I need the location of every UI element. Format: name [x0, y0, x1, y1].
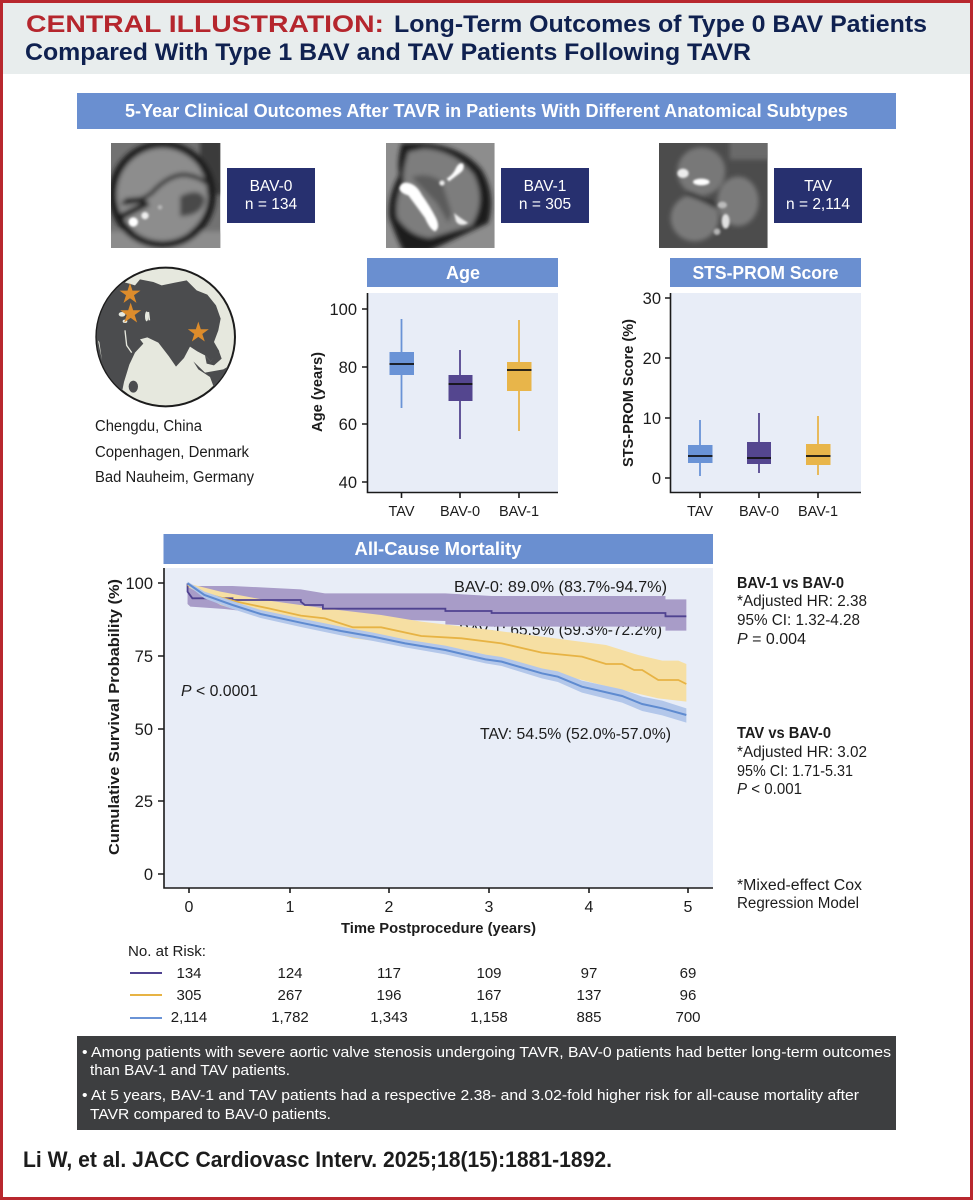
footnote: Regression Model — [737, 895, 859, 912]
key takeaways box: • Among patients with severe aortic valve stenosis undergoing TAVR, BAV-0 patients had better long-term outcomes — [82, 1045, 891, 1061]
title banner: Long-Term Outcomes of Type 0 BAV Patients — [394, 11, 927, 38]
number at risk table: 2,114 — [171, 1009, 207, 1026]
number at risk table: 196 — [376, 987, 402, 1004]
curve: BAV-1 line — [188, 585, 686, 684]
panel: Age box plot: 60 — [339, 416, 357, 434]
group label: TAV: n = 2,114 — [786, 196, 850, 213]
curve: TAV line — [188, 583, 686, 715]
number at risk table — [128, 943, 701, 1026]
heading: STS-PROM Score: STS-PROM Score — [692, 263, 838, 283]
number at risk table: 305 — [176, 987, 202, 1004]
number at risk table: 69 — [680, 965, 696, 982]
number at risk table: 267 — [277, 987, 303, 1004]
heading: Age — [367, 258, 558, 287]
footnote — [737, 877, 862, 912]
panel: STS-PROM box plot: TAV — [687, 504, 713, 520]
panel: All-Cause Mortality survival chart: 5 — [684, 899, 693, 916]
panel: STS-PROM box plot: STS-PROM Score (%) — [620, 319, 637, 467]
label: TAV outcome: TAV: 54.5% (52.0%-57.0%) — [480, 726, 671, 743]
number at risk table: 117 — [377, 965, 401, 982]
panel: STS-PROM box plot: BAV-1 — [798, 504, 838, 520]
title banner — [3, 3, 970, 74]
box: BAV-0 age — [448, 350, 472, 439]
heading: All-Cause Mortality: All-Cause Mortality — [354, 539, 522, 559]
panel: All-Cause Mortality survival chart: 0 — [144, 866, 153, 884]
panel: Age box plot: TAV — [388, 504, 415, 520]
number at risk table: 109 — [476, 965, 502, 982]
panel: All-Cause Mortality survival chart: 4 — [585, 899, 594, 916]
section heading: 5-Year Clinical Outcomes After TAVR in Patients With Different Anatomical Subtypes — [125, 101, 848, 121]
footnote: *Mixed-effect Cox — [737, 877, 862, 894]
curve: TAV confidence band — [188, 582, 686, 723]
panel: STS-PROM box plot: 0 — [652, 470, 661, 488]
heading: Age: Age — [446, 263, 480, 283]
box: BAV-1 STS — [806, 416, 830, 475]
number at risk table: No. at Risk: — [128, 943, 206, 960]
title banner: Compared With Type 1 BAV and TAV Patients Following TAVR — [25, 39, 751, 66]
group label: TAV — [774, 168, 862, 223]
panel: All-Cause Mortality survival chart: Time Postprocedure (years) — [341, 921, 536, 937]
section heading — [77, 93, 896, 129]
label: BAV-1 outcome: BAV-1: 65.5% (59.3%-72.2%) — [459, 622, 662, 639]
statistics: TAV vs BAV-0: *Adjusted HR: 3.02 — [737, 744, 867, 761]
key takeaways box — [77, 1036, 896, 1130]
panel: All-Cause Mortality survival chart: 75 — [135, 648, 153, 666]
CT image: TAV — [659, 138, 773, 248]
panel: All-Cause Mortality survival chart: 50 — [135, 721, 153, 739]
panel: Age box plot: 80 — [339, 359, 357, 377]
number at risk table: 97 — [581, 965, 597, 982]
statistics: TAV vs BAV-0 — [737, 725, 867, 798]
heading: All-Cause Mortality — [164, 534, 713, 564]
panel: All-Cause Mortality survival chart: 2 — [385, 899, 394, 916]
statistics: TAV vs BAV-0: 95% CI: 1.71-5.31 — [737, 763, 853, 780]
panel: All-Cause Mortality survival chart: 0 — [185, 899, 194, 916]
panel: All-Cause Mortality survival chart: 1 — [286, 899, 295, 916]
label: P value: P < 0.0001 — [181, 683, 258, 700]
panel: All-Cause Mortality survival chart — [106, 534, 713, 937]
number at risk table: 137 — [576, 987, 602, 1004]
statistics: TAV vs BAV-0: P < 0.001 — [737, 781, 802, 798]
statistics: TAV vs BAV-0: TAV vs BAV-0 — [737, 725, 831, 742]
group label: BAV-1 — [501, 168, 589, 223]
panel: STS-PROM box plot: BAV-0 — [739, 504, 779, 520]
number at risk table: 167 — [476, 987, 502, 1004]
study site list — [95, 418, 254, 486]
key takeaways box: than BAV-1 and TAV patients. — [90, 1063, 290, 1079]
citation: Li W, et al. JACC Cardiovasc Interv. 2025;18(15):1881-1892. — [23, 1147, 612, 1172]
title banner: CENTRAL ILLUSTRATION: — [26, 11, 384, 38]
CT image: BAV-0 — [111, 143, 220, 248]
statistics: BAV-1 vs BAV-0: BAV-1 vs BAV-0 — [737, 575, 844, 592]
panel: All-Cause Mortality survival chart: 25 — [135, 793, 153, 811]
group label: BAV-1: BAV-1 — [524, 178, 566, 195]
key takeaways box: TAVR compared to BAV-0 patients. — [90, 1107, 331, 1123]
group label: BAV-0: BAV-0 — [250, 178, 293, 195]
group label: TAV: TAV — [804, 178, 833, 195]
icon: globe with study site stars — [90, 268, 238, 406]
curve: BAV-0 confidence band — [188, 586, 686, 631]
number at risk table: 134 — [176, 965, 202, 982]
heading: STS-PROM Score — [670, 258, 861, 287]
panel: Age box plot — [309, 258, 558, 520]
number at risk table: 1,782 — [271, 1009, 309, 1026]
panel: STS-PROM box plot: 30 — [643, 290, 661, 308]
study site list: Copenhagen, Denmark — [95, 444, 249, 461]
box: BAV-1 age — [507, 320, 532, 431]
survival curves — [188, 582, 686, 723]
study site list: Chengdu, China — [95, 418, 202, 435]
CT image: BAV-1 — [386, 143, 495, 251]
statistics: BAV-1 vs BAV-0: *Adjusted HR: 2.38 — [737, 593, 867, 610]
curve: BAV-0 line — [188, 583, 686, 616]
number at risk table: 124 — [277, 965, 303, 982]
panel: Age box plot: BAV-1 — [499, 504, 539, 520]
panel: All-Cause Mortality survival chart: 3 — [485, 899, 494, 916]
number at risk table: 700 — [675, 1009, 701, 1026]
number at risk table: 885 — [576, 1009, 602, 1026]
panel: STS-PROM box plot: 10 — [643, 410, 661, 428]
number at risk table: 1,343 — [370, 1009, 408, 1026]
box: BAV-0 STS — [747, 413, 771, 473]
statistics: BAV-1 vs BAV-0: P = 0.004 — [737, 631, 806, 648]
curve: BAV-1 confidence band — [188, 583, 686, 702]
key takeaways box: • At 5 years, BAV-1 and TAV patients had a respective 2.38- and 3.02-fold higher risk for all-cause mortality after — [82, 1088, 859, 1104]
study site list: Bad Nauheim, Germany — [95, 469, 254, 486]
statistics: BAV-1 vs BAV-0 — [737, 575, 867, 648]
number at risk table: 96 — [680, 987, 696, 1004]
panel: STS-PROM box plot: 20 — [643, 350, 661, 368]
panel: Age box plot: 40 — [339, 474, 357, 492]
box: TAV age — [390, 319, 414, 408]
group label: BAV-0: n = 134 — [245, 196, 297, 213]
panel: All-Cause Mortality survival chart: 100 — [125, 575, 153, 593]
label: BAV-0 outcome: BAV-0: 89.0% (83.7%-94.7%) — [454, 579, 667, 596]
statistics: BAV-1 vs BAV-0: 95% CI: 1.32-4.28 — [737, 612, 860, 629]
box: TAV STS — [688, 420, 712, 476]
group label: BAV-0 — [227, 168, 315, 223]
panel: All-Cause Mortality survival chart: Cumulative Survival Probability (%) — [106, 579, 123, 855]
panel: STS-PROM box plot — [620, 258, 861, 520]
panel: Age box plot: 100 — [329, 301, 357, 319]
panel: Age box plot: Age (years) — [309, 352, 326, 432]
panel: Age box plot: BAV-0 — [440, 504, 480, 520]
number at risk table: 1,158 — [470, 1009, 508, 1026]
group label: BAV-1: n = 305 — [519, 196, 571, 213]
